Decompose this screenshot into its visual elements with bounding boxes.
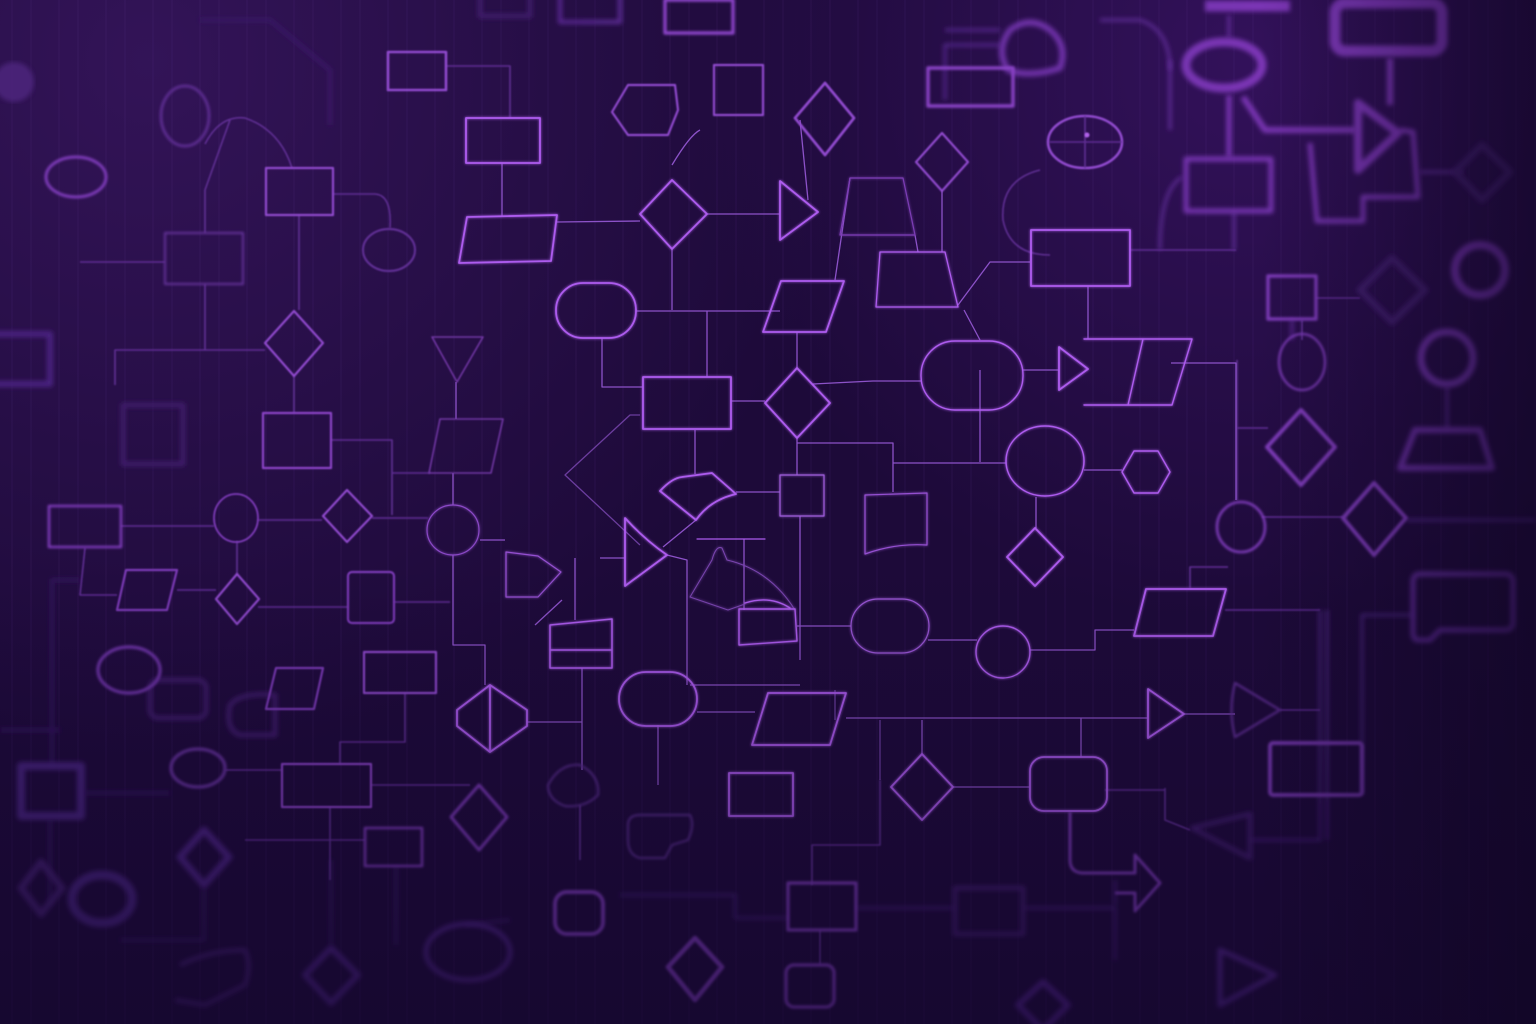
sharp central shapes bbox=[427, 118, 1226, 820]
arrow-like shape bbox=[660, 473, 736, 520]
box left edge bbox=[0, 334, 50, 384]
oval lower left bbox=[98, 647, 160, 693]
diamond below circle bbox=[1007, 528, 1063, 586]
oval lower bbox=[619, 672, 697, 726]
top rectangle partial bbox=[560, 0, 620, 22]
rectangle lower left bbox=[21, 766, 81, 816]
dim rectangle upper left bbox=[123, 405, 183, 464]
dim blob bottom left bbox=[175, 950, 248, 1005]
rectangle top bbox=[388, 52, 446, 90]
diamond lower center left bbox=[451, 785, 507, 850]
oval top bbox=[1002, 22, 1062, 74]
circle right bbox=[1006, 426, 1084, 496]
trapezoid right bbox=[1400, 430, 1492, 468]
circle upper left small bbox=[363, 229, 415, 271]
rectangle lower center left bbox=[365, 828, 422, 866]
hexagon top bbox=[612, 85, 678, 135]
circle right bbox=[1421, 332, 1473, 384]
triangle upper right bbox=[1358, 103, 1398, 170]
hexagon right bbox=[1122, 451, 1170, 493]
dim rounded shape bbox=[628, 815, 692, 858]
rectangle upper right bbox=[1186, 159, 1271, 211]
diamond center bbox=[765, 368, 830, 438]
rounded rectangle lower bbox=[1030, 757, 1107, 811]
bracket top right bbox=[945, 20, 1170, 70]
parallelogram lower right bbox=[1134, 589, 1226, 636]
diamond bottom left bbox=[305, 948, 358, 1003]
dim box lower left bbox=[150, 680, 206, 718]
diamond left row bbox=[323, 490, 372, 542]
looped diamond lower left bbox=[21, 862, 62, 914]
curved fan bbox=[690, 548, 795, 610]
diamond bbox=[640, 180, 707, 249]
circle left row bbox=[214, 494, 258, 542]
parallelogram center bbox=[763, 281, 844, 332]
circle left center bbox=[427, 505, 479, 555]
oval with dots bbox=[1048, 116, 1122, 168]
trapezoid lower bbox=[876, 252, 958, 307]
banded rectangle bbox=[550, 619, 612, 668]
dim oval bbox=[548, 765, 598, 806]
oval top right bbox=[1186, 42, 1262, 88]
split parallelogram bbox=[1084, 339, 1192, 405]
rectangle left bbox=[165, 233, 243, 284]
triangle left center bbox=[625, 518, 667, 586]
rectangle bottom center bbox=[729, 773, 793, 816]
rounded square left bbox=[348, 572, 394, 623]
oval bottom left bbox=[426, 924, 510, 980]
parallelogram lower left bbox=[266, 668, 323, 709]
rectangle right bbox=[1031, 230, 1130, 286]
diamond right large bbox=[1267, 410, 1335, 485]
tab shape upper right bbox=[1310, 130, 1418, 221]
dim blob lower left bbox=[229, 694, 275, 735]
arrow lower right bbox=[1070, 812, 1160, 911]
top rectangle bbox=[665, 0, 733, 33]
diamond bottom bbox=[1018, 982, 1068, 1024]
rectangle bottom center bbox=[788, 883, 856, 930]
mid connectors bbox=[80, 66, 1360, 965]
oval center right bbox=[921, 341, 1023, 410]
square center bbox=[780, 475, 824, 516]
oval right bbox=[1279, 334, 1325, 390]
oval bbox=[556, 283, 636, 338]
diamond top bbox=[795, 83, 854, 155]
rectangle top right cluster bbox=[928, 68, 1013, 106]
triangle bbox=[780, 181, 818, 240]
circle right mid bbox=[1217, 502, 1265, 552]
oval lower left small bbox=[171, 749, 225, 787]
diamond left bbox=[265, 311, 323, 376]
top purple bar bbox=[1205, 0, 1290, 12]
rounded box bottom center bbox=[786, 965, 834, 1007]
rectangle lower right bbox=[1270, 743, 1362, 795]
rectangle center bbox=[643, 377, 731, 429]
rectangle right small bbox=[1268, 276, 1316, 319]
diamond far lower left bbox=[180, 830, 229, 885]
diamond right bbox=[1343, 483, 1406, 555]
rectangle bbox=[466, 118, 540, 163]
top rectangle partial left bbox=[480, 0, 530, 16]
circle upper left bbox=[161, 86, 209, 146]
diamond dim right bbox=[1360, 258, 1425, 322]
triangle bottom right bbox=[1220, 950, 1275, 1005]
small oval left bbox=[46, 157, 106, 197]
diamond left row lower bbox=[216, 574, 259, 624]
rectangle top right bbox=[1335, 3, 1442, 51]
split hexagon bbox=[457, 685, 527, 752]
rectangle bottom bbox=[955, 888, 1023, 934]
oval lower center bbox=[851, 599, 929, 653]
diamond upper right bbox=[916, 133, 968, 191]
triangle lower right bbox=[1148, 689, 1184, 738]
rectangle upper left bbox=[266, 168, 333, 215]
circle lower center bbox=[976, 626, 1030, 678]
oval lower left bbox=[72, 875, 132, 923]
triangle center right bbox=[1059, 347, 1088, 390]
rectangle lower left bbox=[364, 652, 436, 693]
rectangle left row bbox=[49, 506, 121, 547]
trapezoid bbox=[840, 178, 915, 235]
diamond lower center bbox=[891, 754, 953, 820]
triangle lower right bbox=[1192, 814, 1250, 858]
document shape bbox=[865, 493, 927, 554]
parallelogram left row bbox=[117, 570, 177, 610]
central connectors bbox=[453, 120, 1236, 787]
square top bbox=[714, 65, 763, 115]
pentagon shape bbox=[506, 552, 561, 597]
diamond dim upper right bbox=[1455, 145, 1510, 200]
diamond bottom center bbox=[668, 938, 722, 1000]
parallelogram lower center bbox=[752, 693, 846, 745]
rounded box bottom bbox=[555, 892, 603, 934]
rectangle left large bbox=[263, 413, 331, 468]
slightly blurred shapes bbox=[117, 52, 1122, 807]
rectangle small center bbox=[739, 600, 797, 645]
parallelogram left bbox=[429, 419, 503, 473]
speech box right bbox=[1413, 574, 1513, 640]
parallelogram bbox=[459, 215, 557, 263]
circle far right bbox=[1455, 245, 1505, 295]
fading triangle bbox=[1232, 683, 1280, 737]
rectangle lower left center bbox=[282, 764, 371, 807]
triangle down bbox=[432, 337, 483, 382]
